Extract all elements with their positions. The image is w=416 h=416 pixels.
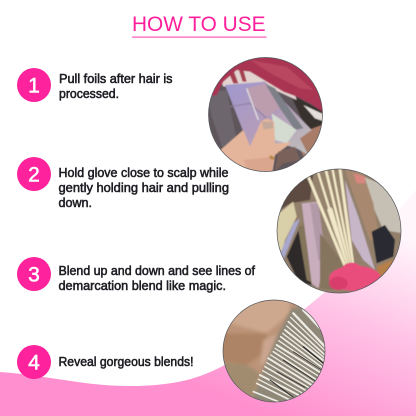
step 4 text: Reveal gorgeous blends!: [58, 354, 194, 369]
badge 3: [17, 257, 51, 291]
step 2 text: down.: [58, 195, 92, 210]
badge 2: [17, 157, 51, 191]
step 3: [17, 257, 255, 293]
step 1 text: Pull foils after hair is: [59, 71, 173, 86]
step 1: [17, 68, 173, 102]
badge 4: 4: [28, 352, 40, 374]
step 2 text: Hold glove close to scalp while: [58, 165, 228, 180]
photo 1: pulling foils by hand: [208, 57, 323, 172]
step 2 text: [58, 165, 229, 210]
step 1 text: processed.: [59, 86, 119, 101]
step 2: [17, 157, 229, 210]
photo 2: blonde strands and pink glove: [276, 168, 402, 294]
badge 3: 3: [28, 264, 40, 286]
step 4: [17, 345, 194, 379]
step 3 text: Blend up and down and see lines of: [58, 263, 255, 278]
photo 3: blended hair at the scalp: [222, 300, 326, 402]
step 2 text: gently holding hair and pulling: [58, 180, 229, 195]
badge 1: [17, 68, 51, 102]
background pink wave: [0, 190, 416, 416]
badge 2: 2: [28, 164, 40, 186]
step 3 text: [58, 263, 255, 293]
badge 4: [17, 345, 51, 379]
step 1 text: [59, 71, 173, 101]
step 3 text: demarcation blend like magic.: [58, 278, 226, 293]
title: HOW TO USE: [132, 12, 266, 36]
badge 1: 1: [28, 74, 40, 98]
